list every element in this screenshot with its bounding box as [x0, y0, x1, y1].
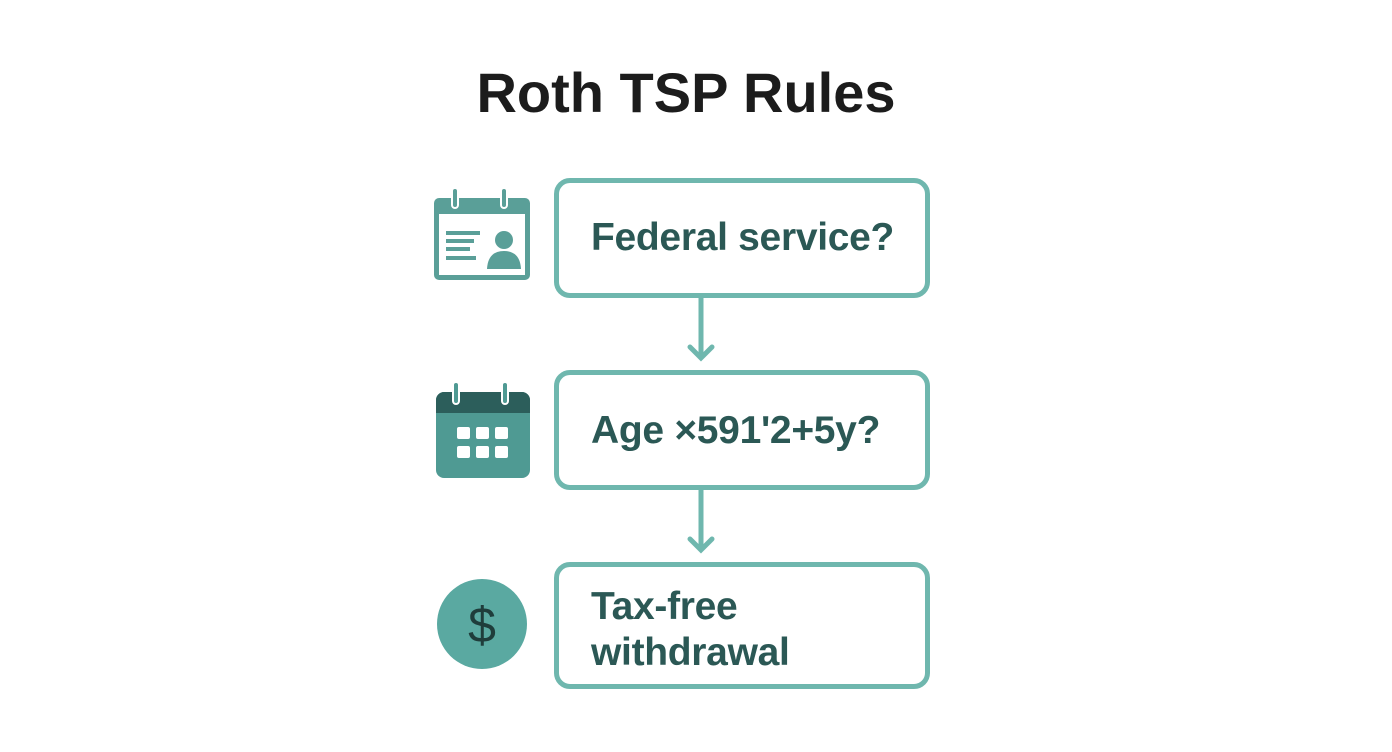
box: tax-free withdrawal: Tax-free: [591, 585, 737, 628]
box: tax-free withdrawal: withdrawal: [591, 631, 790, 674]
icon: dollar: $: [468, 597, 496, 653]
arrow 1: [688, 298, 714, 362]
box: federal service: [554, 178, 930, 298]
box: federal service: Federal service?: [591, 216, 894, 259]
box: age: [554, 370, 930, 490]
icon: calendar: [436, 383, 530, 478]
icon: id card: [434, 189, 530, 280]
title: Roth TSP Rules: [476, 61, 896, 124]
box: age: Age ×591'2+5y?: [591, 409, 880, 452]
box: tax-free withdrawal: [554, 562, 930, 689]
arrow 2: [688, 490, 714, 554]
icon: dollar: [437, 579, 527, 669]
